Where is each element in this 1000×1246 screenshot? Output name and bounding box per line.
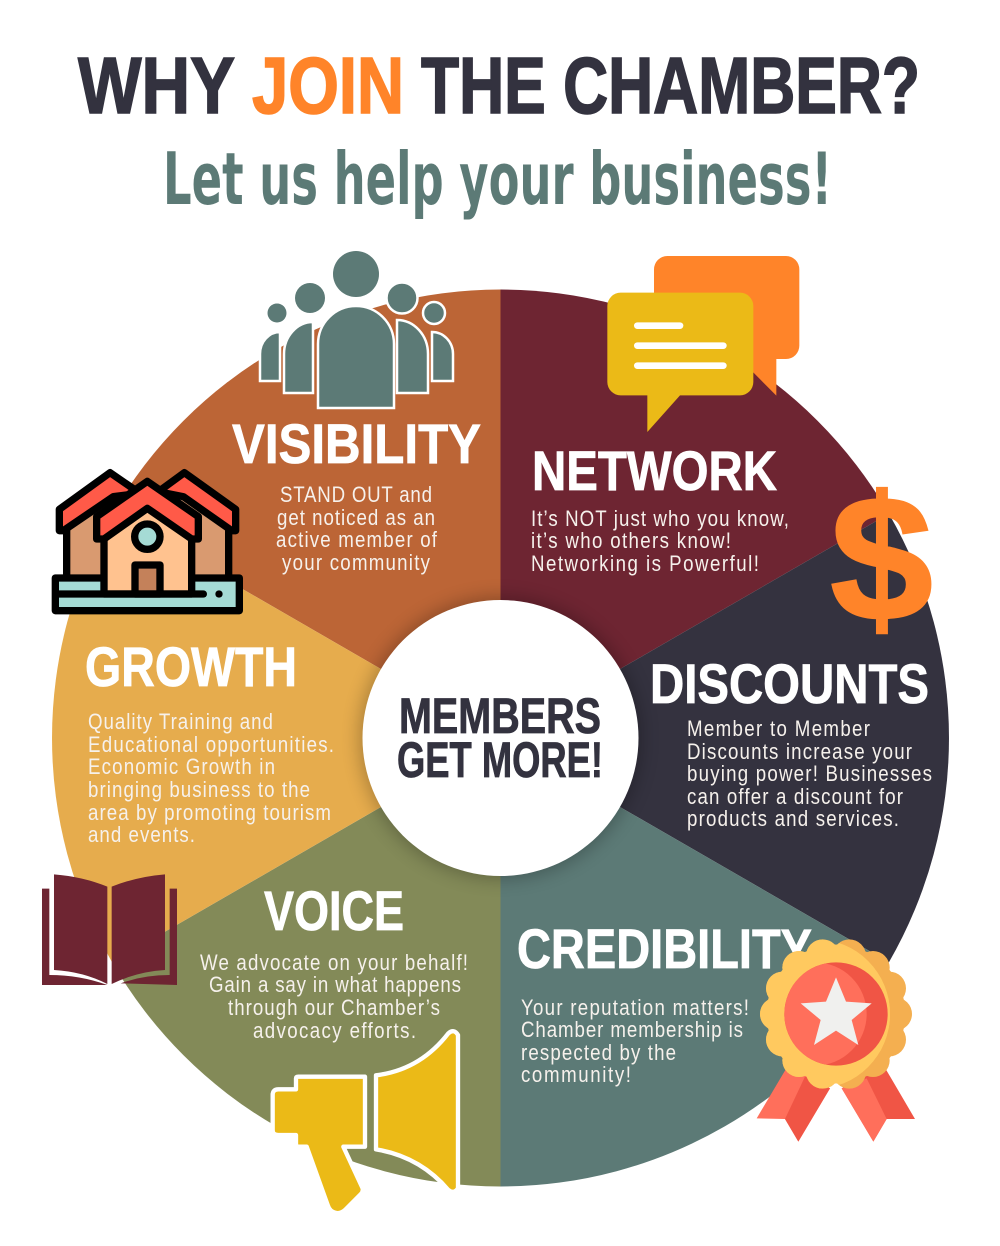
block: visibility — [232, 412, 481, 575]
text: growth: Economic Growth in — [88, 756, 275, 779]
heading: credibility: CREDIBILITY — [517, 917, 812, 980]
icon: award ribbon — [757, 939, 915, 1142]
icon: dollar sign: $ — [830, 459, 933, 658]
center circle shadow — [360, 597, 642, 879]
text: credibility: Your reputation matters! — [521, 997, 749, 1020]
title: WHY — [78, 41, 235, 130]
text: network: it’s who others know! — [531, 530, 731, 553]
text: network: Networking is Powerful! — [531, 553, 759, 576]
icon: houses — [55, 473, 239, 611]
heading: voice: VOICE — [264, 879, 404, 942]
text: voice: Gain a say in what happens — [209, 974, 461, 997]
text: discounts — [687, 718, 932, 831]
text: visibility: STAND OUT and — [280, 484, 432, 507]
heading: visibility: VISIBILITY — [232, 412, 481, 475]
icon: megaphone — [273, 1031, 458, 1213]
text: visibility — [276, 484, 437, 575]
text: growth: and events. — [88, 824, 195, 847]
text: discounts: products and services. — [687, 808, 899, 831]
text: credibility: community! — [521, 1064, 631, 1087]
heading: network: NETWORK — [532, 439, 777, 502]
block: growth — [85, 635, 334, 847]
text: network: It’s NOT just who you know, — [531, 508, 789, 531]
panel: discounts wedge — [500, 514, 949, 962]
block: voice — [200, 879, 468, 1043]
panel: credibility wedge — [500, 738, 889, 1186]
text: voice: advocacy efforts. — [253, 1020, 416, 1043]
text: discounts: Member to Member — [687, 718, 870, 741]
text: visibility: get noticed as an — [277, 507, 435, 530]
panel: growth wedge — [52, 514, 500, 962]
text: growth: bringing business to the — [88, 779, 310, 802]
text: credibility: Chamber membership is — [521, 1019, 743, 1042]
text: growth: Educational opportunities. — [88, 734, 334, 757]
text: voice — [200, 952, 468, 1043]
text: growth — [88, 711, 334, 847]
text: growth: area by promoting tourism — [88, 802, 331, 825]
text: growth: Quality Training and — [88, 711, 273, 734]
panel: network wedge — [500, 290, 889, 738]
title: JOIN — [252, 41, 404, 130]
center text: GET MORE! — [397, 732, 603, 788]
icon: open book — [42, 874, 177, 985]
text: credibility: respected by the — [521, 1042, 676, 1065]
text: network — [531, 508, 789, 576]
icon: speech bubbles — [607, 256, 799, 432]
text: discounts: can offer a discount for — [687, 786, 903, 809]
block: discounts — [650, 652, 932, 831]
panel: visibility wedge — [112, 290, 500, 738]
heading: discounts: DISCOUNTS — [650, 652, 929, 715]
wheel — [52, 290, 949, 1186]
center circle — [362, 600, 638, 876]
text: visibility: active member of — [276, 529, 437, 552]
block: credibility — [517, 917, 812, 1087]
text: discounts: buying power! Businesses — [687, 763, 932, 786]
text: visibility: your community — [282, 552, 431, 575]
heading: growth: GROWTH — [85, 635, 297, 698]
icon: people — [260, 251, 453, 408]
block: network — [531, 439, 789, 576]
center text: MEMBERS — [399, 688, 601, 744]
text: voice: We advocate on your behalf! — [200, 952, 468, 975]
text: discounts: Discounts increase your — [687, 741, 912, 764]
panel: voice wedge — [112, 738, 500, 1186]
title — [78, 41, 920, 130]
center text — [397, 688, 603, 788]
text: credibility — [521, 997, 749, 1087]
text: voice: through our Chamber’s — [228, 997, 440, 1020]
